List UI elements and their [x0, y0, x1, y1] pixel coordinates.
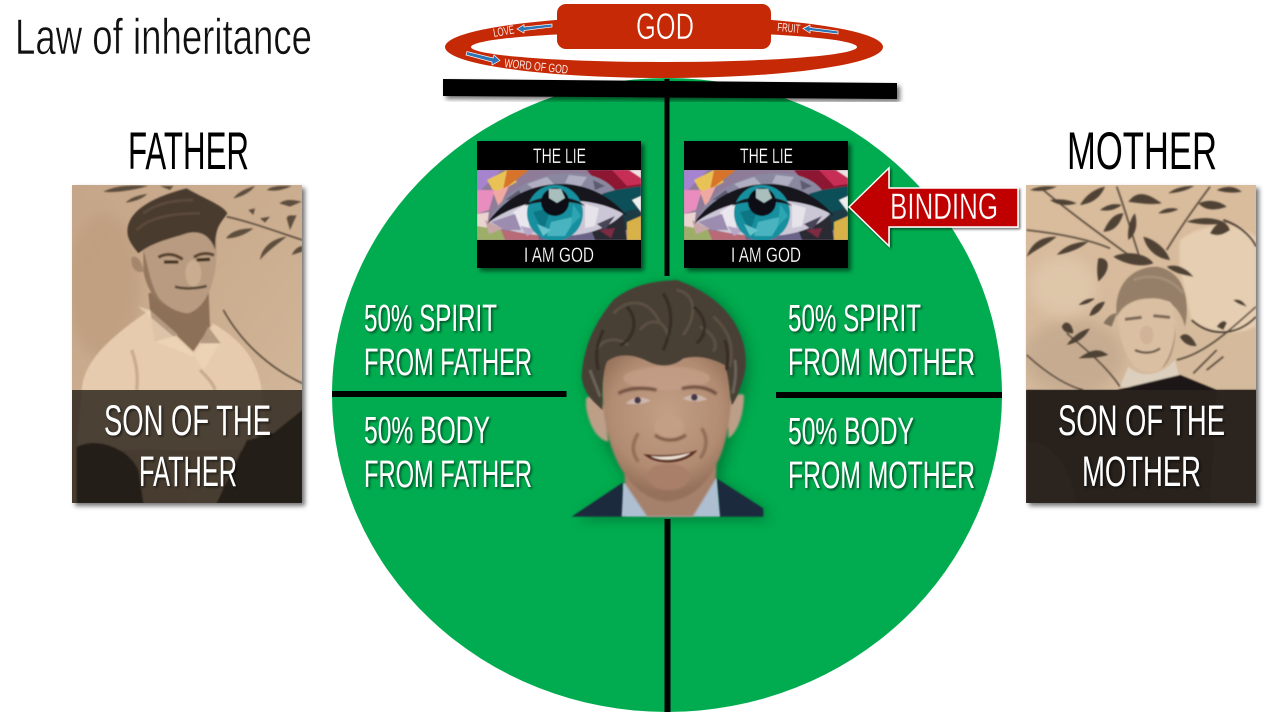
face	[1120, 300, 1174, 364]
caption: mother	[1058, 397, 1225, 496]
label: love	[492, 23, 552, 40]
face	[143, 230, 217, 313]
left texts: FROM FATHER	[364, 454, 532, 496]
left texts: FROM FATHER	[364, 342, 532, 384]
caption band	[72, 390, 302, 503]
suit	[572, 478, 763, 517]
label: word of god	[466, 52, 569, 77]
collar	[1120, 360, 1180, 390]
eye card right: THE LIE	[740, 145, 793, 168]
label: fruit: FRUIT	[777, 20, 801, 36]
hair	[582, 280, 746, 410]
dark dress	[1027, 375, 1257, 503]
binding arrow	[849, 168, 1018, 246]
shirt	[77, 310, 270, 450]
hair	[127, 188, 227, 253]
label: love: LOVE	[492, 23, 515, 40]
branches	[1027, 187, 1256, 390]
forehead highlight	[623, 367, 710, 390]
leaves	[103, 186, 302, 260]
right texts: 50% BODY	[788, 411, 914, 453]
god box: GOD	[636, 6, 694, 47]
right texts: 50% SPIRIT	[788, 298, 921, 340]
red ring	[445, 16, 883, 78]
right texts	[788, 298, 975, 497]
binding arrow: BINDING	[890, 186, 998, 227]
wall tone	[74, 223, 135, 352]
right texts: FROM MOTHER	[788, 342, 975, 384]
left texts: 50% SPIRIT	[364, 298, 497, 340]
heading: father: FATHER	[128, 122, 249, 181]
eye card left: THE LIE	[533, 145, 586, 168]
left texts	[364, 298, 532, 496]
caption: father: SON OF THE	[104, 397, 271, 445]
god ring	[445, 4, 883, 78]
panel: mother photo	[1023, 185, 1257, 503]
eye card left: I AM GOD	[524, 244, 594, 267]
wall texture	[1023, 320, 1123, 393]
hair curls	[590, 290, 736, 397]
horizontal black bar	[443, 79, 897, 99]
label: fruit	[777, 20, 838, 36]
eye card right: I AM GOD	[731, 244, 801, 267]
mouth	[643, 450, 697, 462]
hair	[1116, 267, 1187, 327]
left texts: 50% BODY	[364, 410, 490, 452]
leaves	[1027, 186, 1247, 358]
brows	[618, 387, 717, 394]
skin	[586, 347, 744, 517]
caption band	[1026, 390, 1256, 503]
caption: father	[104, 397, 271, 496]
neck	[148, 292, 210, 352]
eye card right	[684, 141, 848, 268]
eye card left	[477, 141, 641, 268]
smile folds	[633, 428, 706, 462]
right texts: FROM MOTHER	[788, 455, 975, 497]
god box	[557, 4, 771, 49]
green circle	[332, 78, 1002, 712]
caption: father: FATHER	[139, 448, 237, 496]
eyes	[626, 394, 707, 404]
dark sleeve	[77, 410, 302, 503]
title: Law of inheritance	[15, 9, 312, 65]
panel: father photo	[67, 185, 302, 503]
caption: mother: MOTHER	[1082, 448, 1201, 496]
shirt	[622, 478, 720, 517]
cross lines	[332, 79, 1002, 712]
plate	[1179, 226, 1256, 332]
lower face	[647, 463, 690, 490]
nose	[654, 415, 685, 439]
portrait: centre man	[572, 280, 767, 519]
label: word of god: WORD OF GOD	[504, 56, 569, 77]
